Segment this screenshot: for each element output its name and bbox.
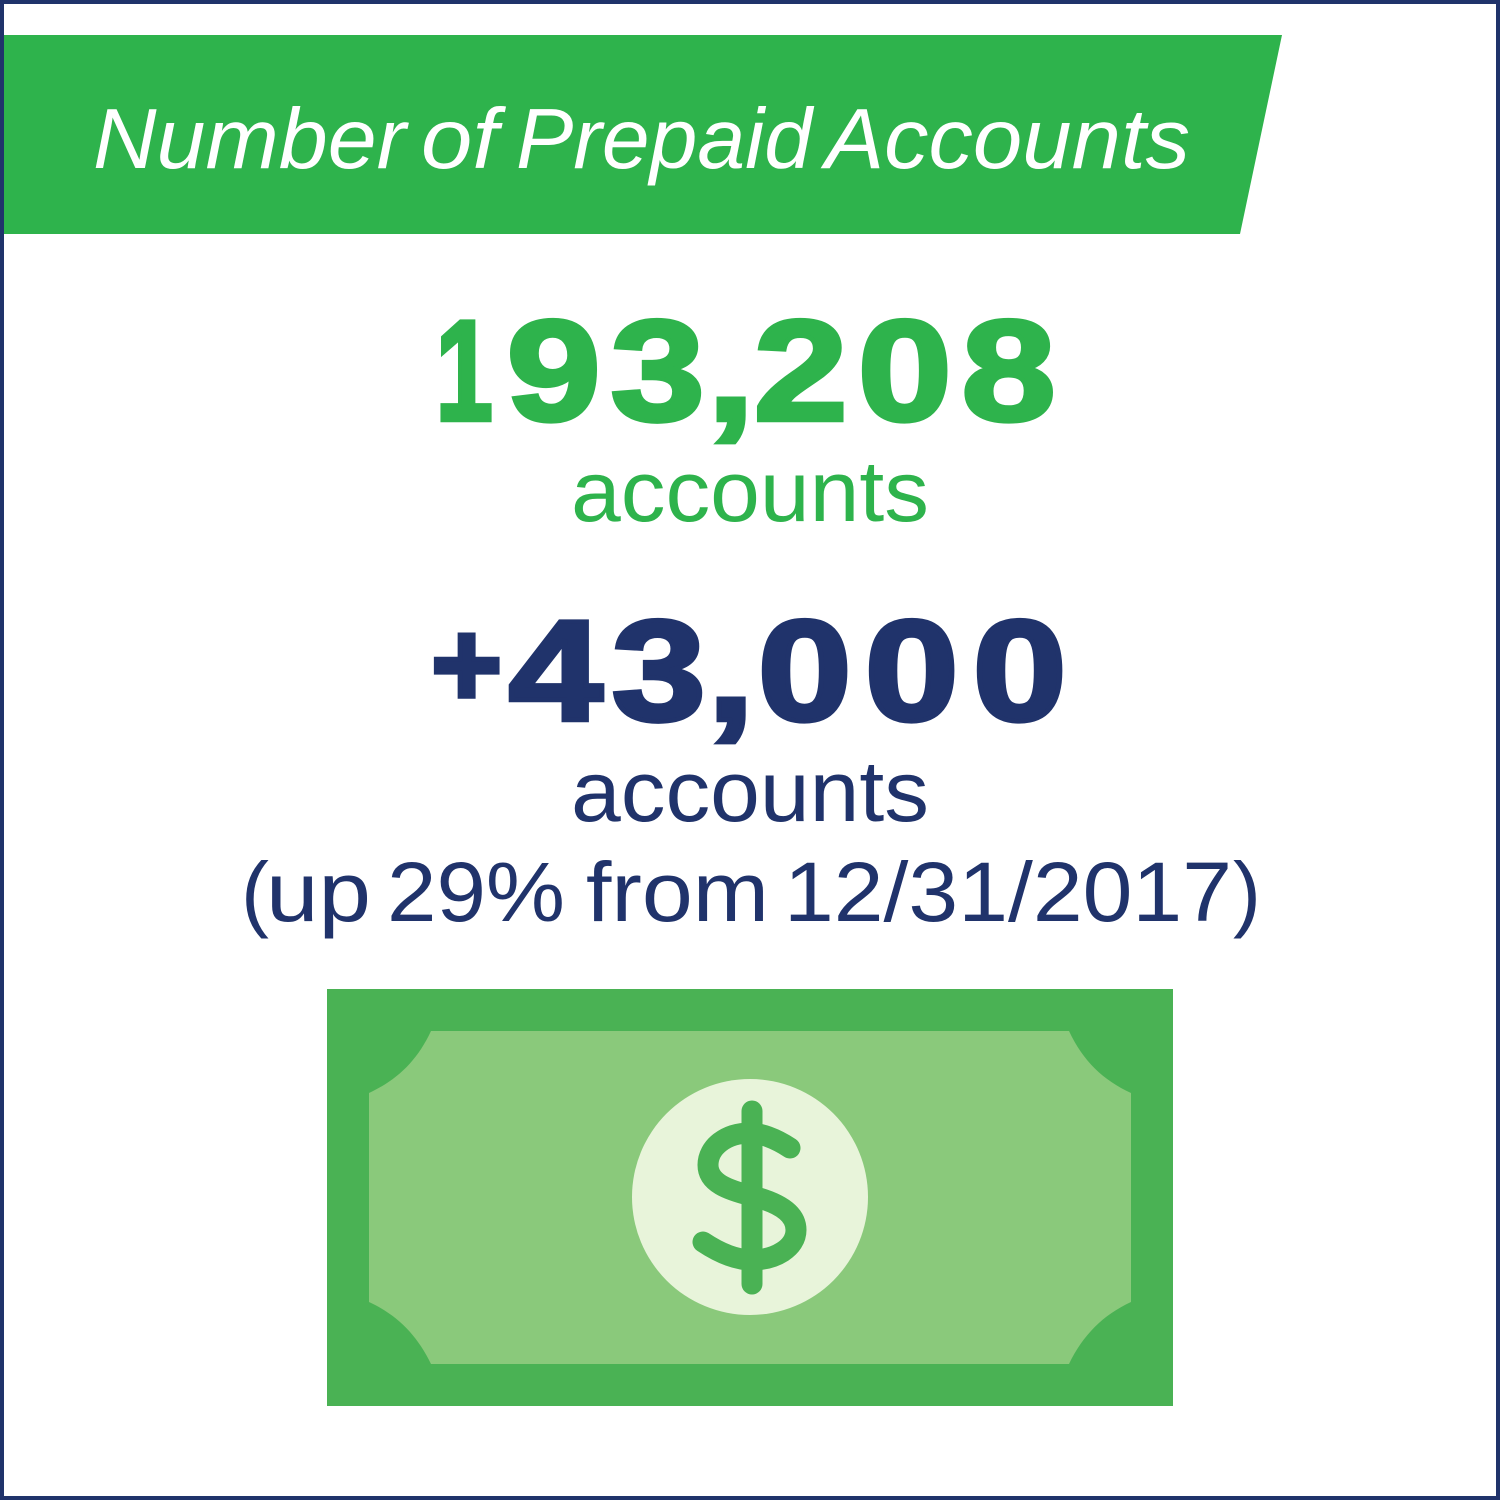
number: +43,000: + xyxy=(431,596,502,732)
stat: total accounts xyxy=(436,291,1056,540)
stat: increase in accounts xyxy=(241,591,1261,939)
label: up 29%: 12/31/2017 xyxy=(784,845,1232,939)
label: accounts: accounts xyxy=(571,744,929,840)
label: up 29%: up xyxy=(266,845,371,939)
title: Prepaid xyxy=(516,92,815,187)
number: +43,000: 43,000 xyxy=(509,591,1067,751)
label: up 29%: ) xyxy=(1233,845,1261,939)
title: of xyxy=(421,92,506,187)
title: Number xyxy=(93,92,410,187)
icon: dollar bill xyxy=(327,989,1173,1406)
title: Accounts xyxy=(820,92,1190,187)
icon: dollar sign xyxy=(703,1111,796,1284)
label: up 29%: from xyxy=(586,845,769,939)
label: accounts: accounts xyxy=(571,444,929,540)
number: 193,208: 1 xyxy=(436,291,493,451)
number: 193,208: 93,208 xyxy=(507,291,1056,451)
label: up 29%: ( xyxy=(241,845,269,939)
title banner xyxy=(4,35,1282,234)
label: up 29%: 29% xyxy=(387,845,565,939)
